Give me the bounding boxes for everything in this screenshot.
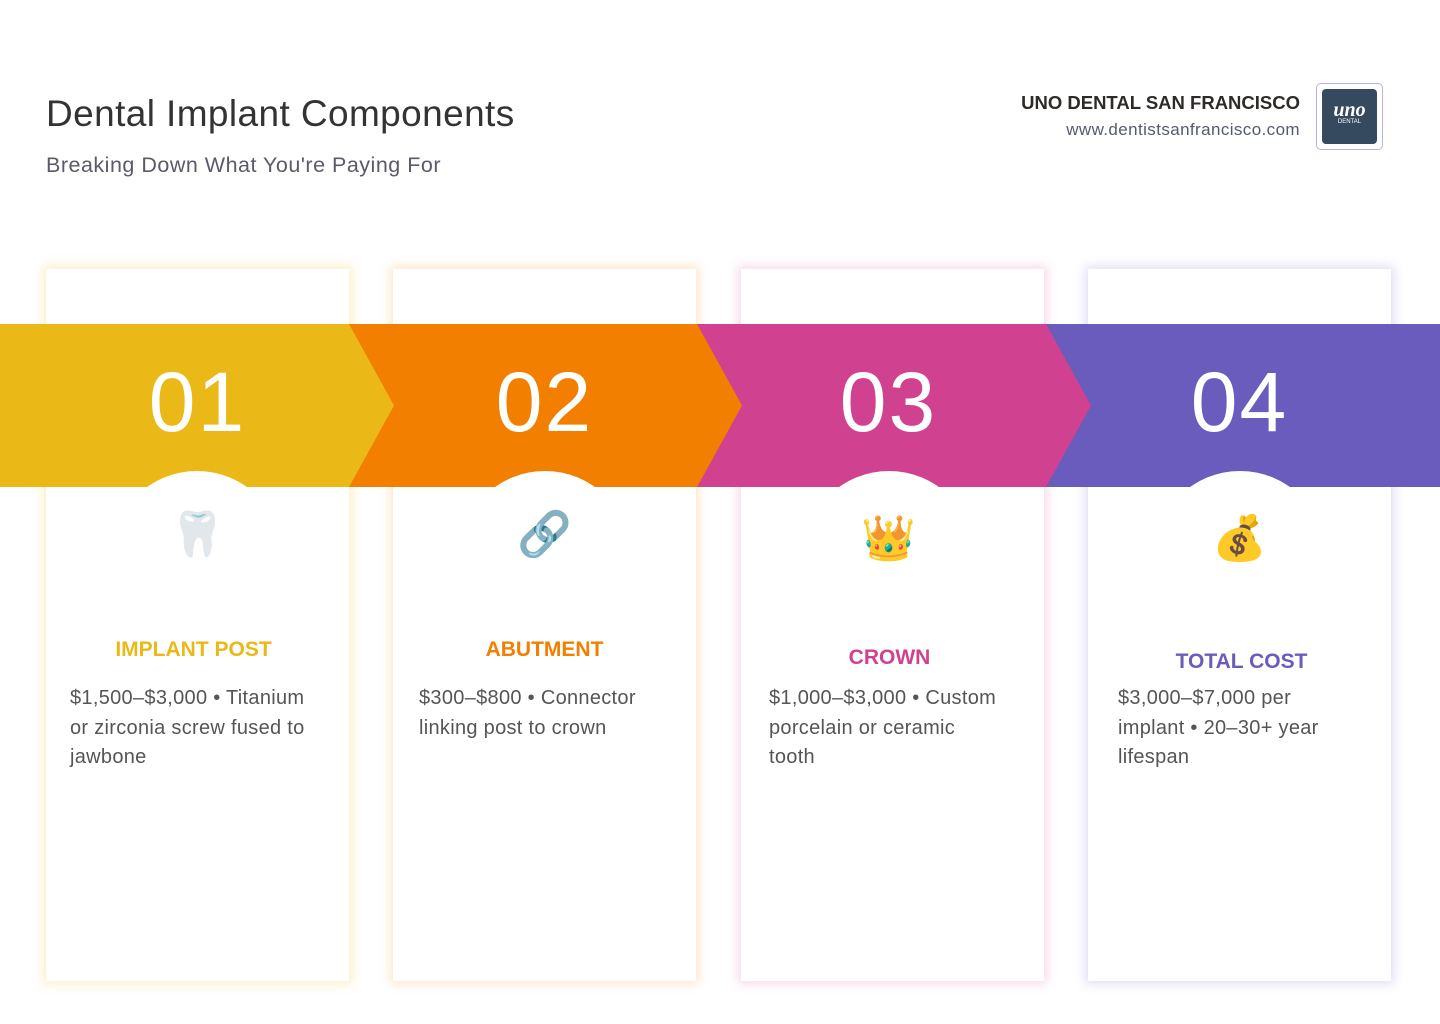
logo: DENTAL (1338, 119, 1361, 125)
card 4 (1088, 269, 1391, 981)
number 01: 01 (149, 355, 246, 449)
chevron band (0, 324, 1440, 487)
text: crown: $1,000–$3,000 • Custom porcelain or ceramic tooth (769, 687, 996, 768)
icon: link: 🔗 (517, 508, 572, 560)
circles (111, 471, 283, 643)
number 02: 02 (496, 355, 593, 449)
heading: total cost: TOTAL COST (1176, 650, 1307, 673)
card 2 (393, 269, 696, 981)
heading: crown: CROWN (849, 646, 930, 669)
icon: money bag: 💰 (1212, 512, 1267, 564)
number 03: 03 (840, 355, 937, 449)
icon: tooth: 🦷 (170, 508, 225, 560)
heading: abutment: ABUTMENT (486, 638, 603, 661)
card 1 (46, 269, 349, 981)
card 3 (741, 269, 1044, 981)
brand name: UNO DENTAL SAN FRANCISCO (1021, 92, 1300, 113)
text: abutment: $300–$800 • Connector linking post to crown (419, 687, 636, 738)
title: Dental Implant Components (46, 93, 515, 134)
text: implant post: $1,500–$3,000 • Titanium or zirconia screw fused to jawbone (70, 687, 305, 768)
subtitle: Breaking Down What You're Paying For (46, 153, 441, 177)
logo: uno (1333, 99, 1366, 121)
brand url: www.dentistsanfrancisco.com (1066, 120, 1300, 139)
icon: crown: 👑 (861, 512, 916, 564)
logo (1316, 83, 1383, 150)
heading: implant post: IMPLANT POST (115, 638, 272, 661)
text: total cost: $3,000–$7,000 per implant • 20–30+ year lifespan (1118, 687, 1319, 768)
number 04: 04 (1191, 355, 1288, 449)
